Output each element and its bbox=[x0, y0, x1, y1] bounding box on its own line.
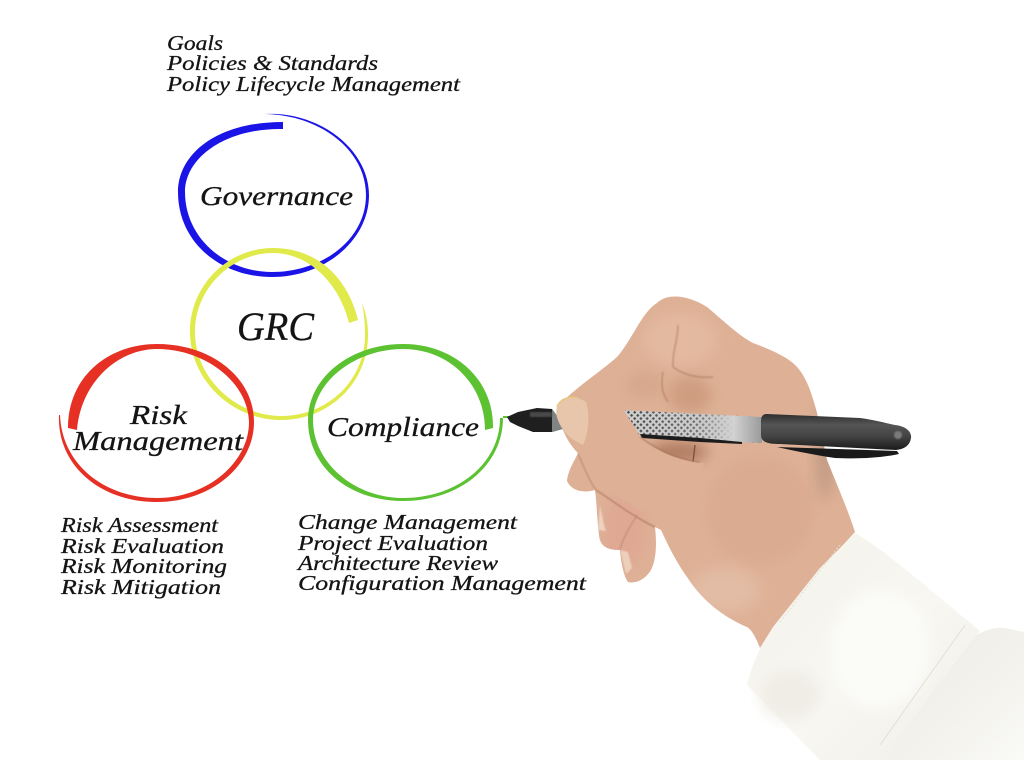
label: Governance: Governance bbox=[200, 181, 353, 211]
label: Compliance: Compliance bbox=[327, 412, 479, 442]
illustration: hand holding marker bbox=[507, 296, 1024, 760]
thumbnail bbox=[556, 398, 588, 445]
label: Risk Management bbox=[72, 400, 245, 456]
text block: Governance items bbox=[166, 31, 461, 96]
shirt cuff bbox=[747, 533, 980, 760]
marker pen bbox=[507, 408, 911, 458]
text block: Risk Management items bbox=[60, 513, 227, 599]
text block: Risk Management items: Risk Evaluation bbox=[60, 534, 224, 558]
text block: Risk Management items: Risk Monitoring bbox=[60, 554, 227, 578]
text block: Compliance items: Change Management bbox=[298, 510, 518, 534]
text block: Compliance items: Project Evaluation bbox=[297, 531, 488, 555]
thumb over the pen bbox=[556, 397, 705, 520]
hand bbox=[556, 296, 855, 648]
pen clip bbox=[777, 447, 899, 458]
shirt sleeve bbox=[880, 628, 1024, 760]
text block: Compliance items: Architecture Review bbox=[296, 551, 499, 575]
label: GRC: GRC bbox=[237, 304, 315, 349]
text block: Risk Management items: Risk Mitigation bbox=[60, 575, 221, 599]
pen barrel bbox=[620, 410, 762, 443]
pen cap bbox=[761, 414, 911, 450]
text block: Governance items: Policies & Standards bbox=[166, 51, 378, 75]
text block: Compliance items bbox=[296, 510, 587, 595]
circle: Compliance (green) bbox=[308, 344, 510, 501]
circle: Risk Management (red) bbox=[59, 344, 254, 502]
panel: GRC diagram bbox=[59, 114, 510, 502]
text block: Governance items: Policy Lifecycle Management bbox=[166, 72, 461, 96]
text block: Risk Management items: Risk Assessment bbox=[60, 513, 219, 537]
pen tip bbox=[507, 408, 566, 432]
text block: Governance items: Goals bbox=[167, 31, 223, 55]
text block: Compliance items: Configuration Management bbox=[298, 571, 587, 595]
label: Risk Management: Risk bbox=[129, 400, 188, 430]
label: Risk Management: Management bbox=[72, 426, 245, 456]
circle: Governance (blue) bbox=[178, 114, 369, 277]
circle: GRC (yellow) bbox=[190, 248, 368, 420]
